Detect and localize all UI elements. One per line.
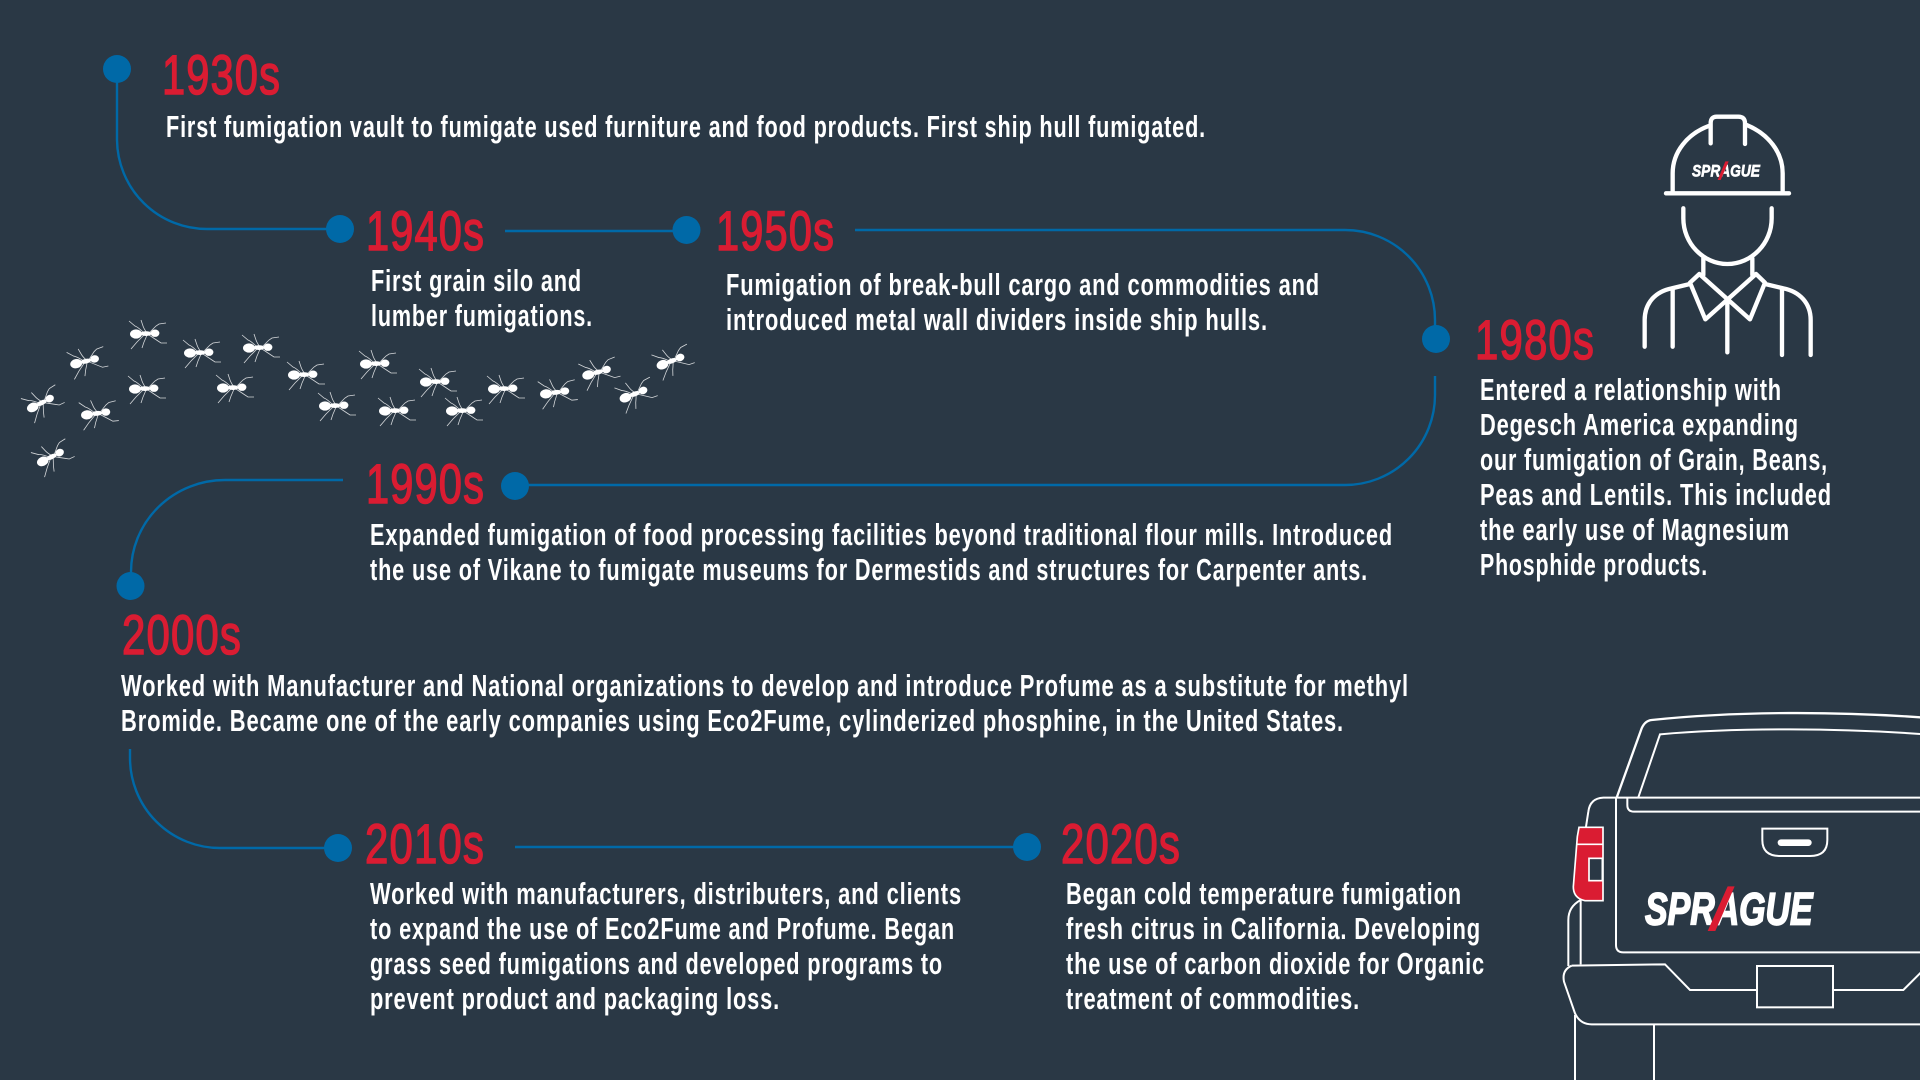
text 2020s: fresh citrus in California. Developing	[1066, 911, 1481, 946]
timeline dot 1990s	[501, 472, 529, 500]
entry: 1990s	[366, 452, 1393, 587]
timeline connector: 2000s to 2010s	[130, 749, 338, 848]
timeline connector: 1980s to 1990s	[515, 376, 1435, 485]
heading 1950s: 1950s	[716, 199, 835, 262]
text 1940s: lumber fumigations.	[371, 298, 593, 333]
text 1950s: introduced metal wall dividers inside ship hulls.	[726, 302, 1268, 337]
text 2000s	[121, 668, 1409, 738]
timeline connector: 2010s to 2020s	[515, 846, 1027, 848]
entry: 1930s	[162, 43, 1206, 144]
hard hat	[1666, 117, 1789, 193]
text 1980s: Phosphide products.	[1480, 547, 1708, 582]
text 1980s: the early use of Magnesium	[1480, 512, 1790, 547]
timeline dot 2000s	[116, 572, 144, 600]
text 1990s: Expanded fumigation of food processing facilities beyond traditional flour mills. Introduced	[370, 517, 1393, 552]
text 2000s: Worked with Manufacturer and National organizations to develop and introduce Profume as a substitute for methyl	[121, 668, 1409, 703]
head and shoulders	[1645, 208, 1811, 355]
tailgate	[1586, 798, 1920, 952]
heading 1990s: 1990s	[366, 452, 485, 515]
heading 2010s: 2010s	[365, 812, 485, 875]
timeline dot 2010s	[324, 834, 352, 862]
entry: 2010s	[365, 812, 962, 1016]
text 2010s: prevent product and packaging loss.	[370, 981, 780, 1016]
text 1980s	[1480, 372, 1832, 582]
cab and rear window	[1617, 713, 1920, 798]
text 1980s: Entered a relationship with	[1480, 372, 1782, 407]
timeline dot 1940s	[326, 215, 354, 243]
text 2010s: Worked with manufacturers, distributers, and clients	[370, 876, 962, 911]
text 2020s: treatment of commodities.	[1066, 981, 1360, 1016]
text 1980s: Degesch America expanding	[1480, 407, 1799, 442]
icon: worker in hard hat	[1645, 117, 1811, 355]
text 1940s	[371, 263, 593, 333]
text 1950s: Fumigation of break-bull cargo and commodities and	[726, 267, 1320, 302]
text 2020s	[1066, 876, 1485, 1016]
entry: 1950s	[716, 199, 1320, 337]
bumper and body	[1564, 900, 1920, 1080]
text 1990s: the use of Vikane to fumigate museums for Dermestids and structures for Carpenter ants.	[370, 552, 1368, 587]
entry: 2020s	[1061, 812, 1485, 1016]
icon: line of ants	[20, 320, 697, 478]
timeline connector: 1990s to 2000s	[131, 480, 343, 586]
text 2010s: grass seed fumigations and developed programs to	[370, 946, 943, 981]
text 2020s: the use of carbon dioxide for Organic	[1066, 946, 1485, 981]
heading 1980s: 1980s	[1475, 308, 1595, 371]
text 1990s	[370, 517, 1393, 587]
timeline dot 1980s	[1422, 325, 1450, 353]
text 1950s	[726, 267, 1320, 337]
icon: pickup truck rear	[1564, 713, 1920, 1080]
timeline connector: 1930s to 1940s	[117, 69, 340, 229]
text 2000s: Bromide. Became one of the early companies using Eco2Fume, cylinderized phosphine, in the United States.	[121, 703, 1344, 738]
truck logo: SPRAGUE	[1645, 883, 1814, 934]
tail light	[1573, 827, 1603, 901]
text 2010s	[370, 876, 962, 1016]
entry: 1980s	[1475, 308, 1832, 582]
heading 1940s: 1940s	[366, 199, 485, 262]
heading 2000s: 2000s	[122, 603, 242, 666]
timeline dot 2020s	[1013, 833, 1041, 861]
entry: 1940s	[366, 199, 593, 333]
heading 1930s: 1930s	[162, 43, 281, 106]
text 1940s: First grain silo and	[371, 263, 582, 298]
text 2010s: to expand the use of Eco2Fume and Profume. Began	[370, 911, 955, 946]
text 2020s: Began cold temperature fumigation	[1066, 876, 1462, 911]
heading 2020s: 2020s	[1061, 812, 1181, 875]
timeline dot 1930s	[103, 55, 131, 83]
timeline dot 1950s	[672, 216, 700, 244]
timeline connector: 1940s to 1950s	[505, 230, 686, 232]
entry: 2000s	[121, 603, 1409, 738]
text 1930s: First fumigation vault to fumigate used furniture and food products. First ship hull fumigated.	[166, 109, 1206, 144]
timeline connector: 1950s to 1980s	[855, 230, 1435, 339]
hard hat: SPRAGUE	[1692, 162, 1761, 181]
